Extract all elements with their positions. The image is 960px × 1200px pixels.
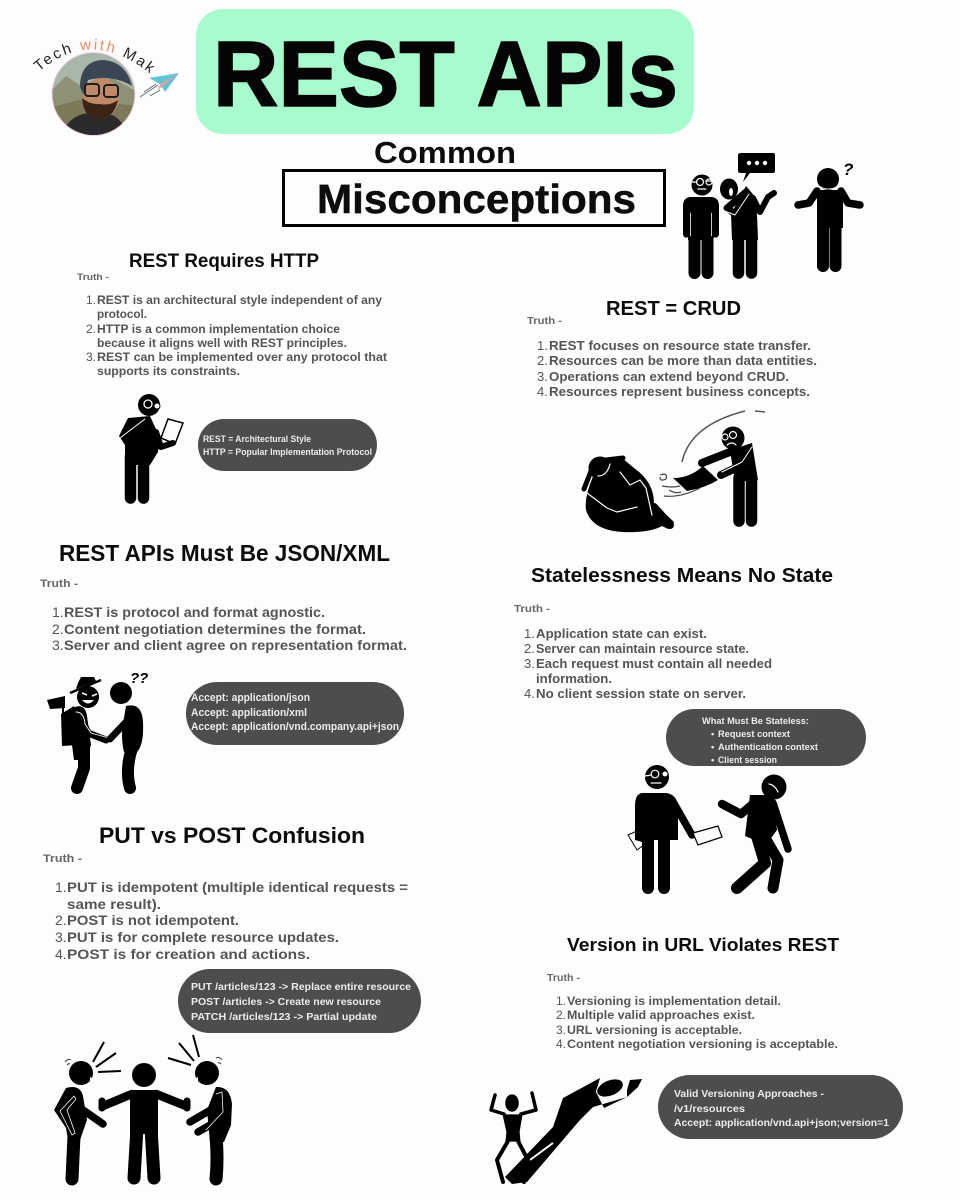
truth list: 2. bbox=[52, 621, 64, 637]
truth list: 1. bbox=[537, 338, 548, 353]
truth list bbox=[537, 338, 817, 399]
heading: REST APIs Must Be JSON/XML bbox=[59, 540, 390, 566]
callout: Accept: application/vnd.api+json;version=1 bbox=[674, 1117, 889, 1129]
truth list: HTTP is a common implementation choice bbox=[97, 322, 340, 336]
truth list: PUT is for complete resource updates. bbox=[67, 929, 339, 945]
icon: person handing paper to person on beanbag bbox=[584, 411, 765, 532]
heading: Version in URL Violates REST bbox=[567, 934, 840, 955]
confused person: ? bbox=[843, 160, 854, 179]
truth list: POST is not idempotent. bbox=[67, 912, 239, 928]
truth list bbox=[55, 879, 408, 962]
truth list: 3. bbox=[524, 656, 535, 671]
section: Version in URL Violates REST bbox=[491, 934, 903, 1184]
truth list: 4. bbox=[55, 946, 67, 962]
left person bbox=[69, 1061, 93, 1085]
truth list: REST is an architectural style independent of any bbox=[97, 293, 382, 307]
heading: PUT vs POST Confusion bbox=[99, 823, 365, 848]
figure bbox=[505, 1094, 519, 1112]
subtitle box: Misconceptions bbox=[284, 170, 664, 226]
icon: person reading paper bbox=[119, 394, 183, 498]
callout: HTTP = Popular Implementation Protocol bbox=[203, 447, 372, 457]
truth label: Truth - bbox=[77, 272, 109, 283]
callout: Authentication context bbox=[718, 742, 819, 753]
section: REST Requires HTTP bbox=[77, 251, 387, 498]
shadow bbox=[505, 1078, 642, 1184]
truth list: 3. bbox=[537, 369, 548, 384]
icon: handshake between two people: ?? bbox=[130, 670, 148, 687]
person speaking bbox=[720, 178, 774, 273]
truth label: Truth - bbox=[43, 853, 82, 865]
truth list: 1. bbox=[52, 604, 64, 620]
truth list: REST is protocol and format agnostic. bbox=[64, 604, 325, 620]
truth list: Operations can extend beyond CRUD. bbox=[549, 369, 789, 384]
icon: flexing figure with large shadow bbox=[491, 1075, 642, 1184]
truth list: 1. bbox=[55, 879, 67, 895]
truth list: 1. bbox=[524, 626, 535, 641]
right person bbox=[195, 1061, 219, 1085]
truth list: Resources can be more than data entities. bbox=[549, 353, 817, 368]
backpack and axe bbox=[62, 698, 64, 745]
truth list: information. bbox=[536, 671, 612, 686]
logo text: Tech with Mak bbox=[32, 38, 154, 74]
callout: • bbox=[711, 755, 715, 766]
callout: /v1/resources bbox=[674, 1103, 745, 1115]
icon: person handing paper to walking person bbox=[628, 765, 788, 888]
callout bbox=[658, 1075, 903, 1139]
callout: Accept: application/xml bbox=[191, 707, 307, 719]
callout: REST = Architectural Style bbox=[203, 434, 311, 444]
subtitle box: Misconceptions: Misconceptions bbox=[317, 176, 636, 222]
truth list: 4. bbox=[556, 1037, 566, 1051]
truth list bbox=[556, 994, 838, 1051]
truth label: Truth - bbox=[40, 578, 78, 590]
icon: handshake between two people bbox=[47, 670, 148, 788]
truth label: Truth - bbox=[547, 973, 580, 984]
callout: Request context bbox=[718, 729, 791, 740]
callout bbox=[178, 969, 421, 1033]
truth list: PUT is idempotent (multiple identical requests = bbox=[67, 879, 408, 895]
middle person bbox=[132, 1063, 156, 1087]
truth list: Server can maintain resource state. bbox=[536, 641, 749, 656]
subtitle: Common: Common bbox=[374, 135, 516, 170]
truth list: 2. bbox=[55, 912, 67, 928]
icon: people talking and confused person bbox=[683, 153, 860, 273]
truth list: POST is for creation and actions. bbox=[67, 946, 310, 962]
callout: • bbox=[711, 742, 715, 753]
truth list: 3. bbox=[52, 637, 64, 653]
truth list: same result). bbox=[67, 896, 161, 912]
callout: PUT /articles/123 -> Replace entire resource bbox=[191, 981, 411, 993]
truth list bbox=[86, 293, 387, 378]
truth list: 2. bbox=[537, 353, 548, 368]
logo: Tech with Mak bbox=[32, 38, 179, 136]
section: Statelessness Means No State bbox=[514, 564, 866, 888]
truth label: Truth - bbox=[514, 603, 551, 615]
truth list: supports its constraints. bbox=[97, 364, 240, 378]
truth list: Server and client agree on representation format. bbox=[64, 637, 407, 653]
truth list: Each request must contain all needed bbox=[536, 656, 772, 671]
truth list: Application state can exist. bbox=[536, 626, 707, 641]
section: REST = CRUD bbox=[527, 298, 817, 532]
truth list: 2. bbox=[524, 641, 535, 656]
callout bbox=[198, 419, 377, 471]
truth list: URL versioning is acceptable. bbox=[567, 1023, 742, 1037]
callout: POST /articles -> Create new resource bbox=[191, 996, 381, 1008]
truth list: REST can be implemented over any protocol that bbox=[97, 350, 387, 364]
left person with hat bbox=[77, 686, 99, 708]
truth list: Content negotiation determines the format. bbox=[64, 621, 366, 637]
truth list: REST focuses on resource state transfer. bbox=[549, 338, 811, 353]
truth list: 3. bbox=[556, 1023, 566, 1037]
truth list: 2. bbox=[556, 1008, 566, 1022]
heading: REST Requires HTTP bbox=[129, 251, 319, 272]
right person bbox=[110, 682, 132, 704]
truth list: No client session state on server. bbox=[536, 686, 746, 701]
standing person bbox=[722, 426, 744, 450]
callout: Accept: application/vnd.company.api+json bbox=[191, 721, 399, 733]
truth list bbox=[52, 604, 407, 653]
truth list bbox=[524, 626, 772, 701]
truth list: protocol. bbox=[97, 307, 147, 321]
callout bbox=[186, 682, 404, 745]
heading: REST = CRUD bbox=[606, 298, 741, 320]
callout: Valid Versioning Approaches - bbox=[674, 1088, 824, 1100]
truth list: Content negotiation versioning is acceptable. bbox=[567, 1037, 838, 1051]
section: PUT vs POST Confusion bbox=[43, 823, 421, 1179]
truth label: Truth - bbox=[527, 316, 562, 327]
callout bbox=[666, 709, 866, 766]
truth list: 4. bbox=[524, 686, 535, 701]
truth list: 1. bbox=[556, 994, 566, 1008]
truth list: 2. bbox=[86, 322, 96, 336]
callout: Client session bbox=[718, 755, 777, 766]
truth list: Resources represent business concepts. bbox=[549, 384, 810, 399]
truth list: 1. bbox=[86, 293, 96, 307]
section: REST APIs Must Be JSON/XML bbox=[40, 540, 407, 788]
truth list: 4. bbox=[537, 384, 548, 399]
truth list: Versioning is implementation detail. bbox=[567, 994, 781, 1008]
icon: person separating two arguing people bbox=[54, 1035, 232, 1179]
title banner: REST APIs bbox=[213, 22, 678, 126]
speech bubble bbox=[738, 153, 775, 182]
truth list: 3. bbox=[86, 350, 96, 364]
heading: Statelessness Means No State bbox=[531, 564, 833, 587]
callout: What Must Be Stateless: bbox=[702, 716, 809, 727]
person with glasses bbox=[683, 174, 719, 273]
callout: • bbox=[711, 729, 715, 740]
truth list: because it aligns well with REST principles. bbox=[97, 336, 347, 350]
icon: paper plane bbox=[140, 73, 179, 97]
truth list: Multiple valid approaches exist. bbox=[567, 1008, 755, 1022]
confused person bbox=[798, 160, 860, 266]
callout: PATCH /articles/123 -> Partial update bbox=[191, 1011, 377, 1023]
beanbag person bbox=[586, 458, 674, 532]
truth list: 3. bbox=[55, 929, 67, 945]
callout: Accept: application/json bbox=[191, 692, 310, 704]
